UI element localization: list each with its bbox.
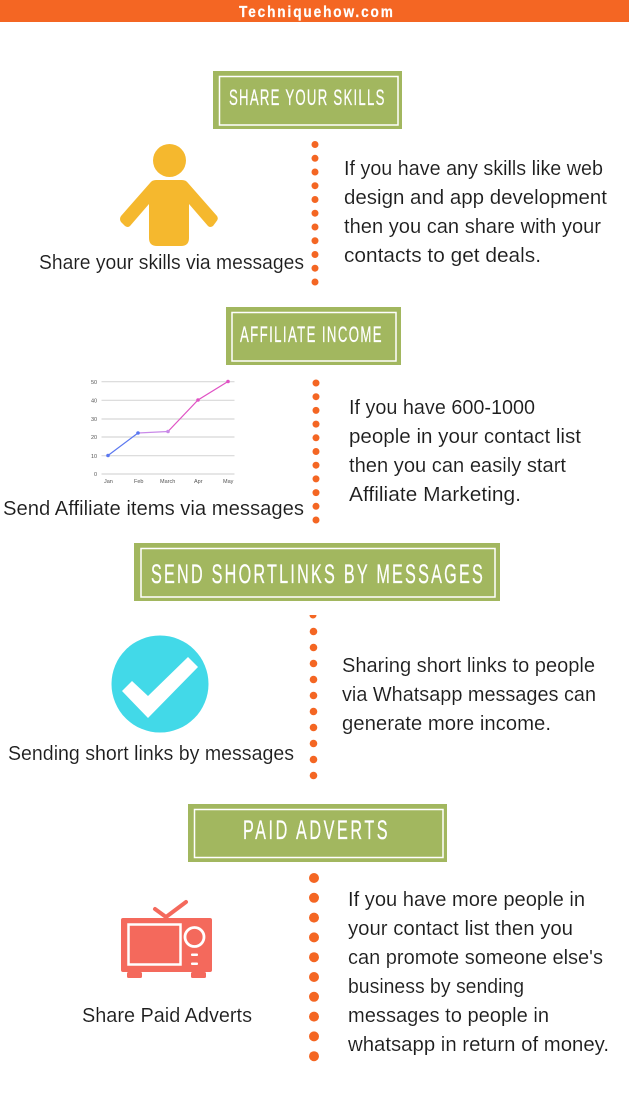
- caption: sending short links by messages: Sending short links by messages: [8, 743, 294, 765]
- line chart: 10: [91, 454, 97, 460]
- heading: paid adverts: PAID ADVERTS: [243, 815, 388, 845]
- icon: check mark: [112, 636, 208, 732]
- line chart: 20: [91, 435, 97, 441]
- heading: share your skills: [213, 71, 402, 129]
- line chart: [91, 380, 234, 485]
- dotted divider 1: [312, 141, 318, 286]
- line chart: 50: [91, 380, 97, 386]
- caption: send affiliate items via messages: Send Affiliate items via messages: [3, 498, 304, 520]
- panel: send shortlinks by messages: [8, 543, 596, 779]
- text block: shortlinks description: via Whatsapp messages can: [342, 684, 596, 706]
- text block: affiliate income description: If you have 600-1000: [349, 397, 535, 419]
- text block: paid adverts description: messages to people in: [348, 1005, 549, 1027]
- text block: share your skills description: contacts to get deals.: [344, 245, 541, 267]
- text block: shortlinks description: Sharing short links to people: [342, 655, 595, 677]
- heading: send shortlinks by messages: [134, 543, 500, 601]
- dotted divider 4: [309, 873, 319, 1061]
- text block: shortlinks description: [342, 655, 596, 735]
- line chart: 40: [91, 398, 97, 404]
- text block: paid adverts description: business by sending: [348, 976, 524, 998]
- text block: paid adverts description: If you have more people in: [348, 889, 585, 911]
- text block: affiliate income description: people in your contact list: [349, 426, 581, 448]
- panel: share your skills: [39, 71, 607, 286]
- icon: person: [120, 144, 218, 246]
- dotted divider 3: [310, 615, 317, 779]
- line chart: Jan: [104, 479, 113, 485]
- text block: paid adverts description: [347, 889, 609, 1056]
- panel: affiliate income: [3, 307, 581, 524]
- text block: share your skills description: [344, 158, 607, 267]
- line chart: March: [160, 479, 175, 485]
- text block: paid adverts description: can promote someone else's: [348, 947, 603, 969]
- text block: paid adverts description: whatsapp in return of money.: [347, 1034, 609, 1056]
- line chart: Feb: [134, 479, 143, 485]
- text block: affiliate income description: then you can easily start: [349, 455, 566, 477]
- heading: send shortlinks by messages: SEND SHORTLINKS BY MESSAGES: [151, 559, 483, 589]
- text block: share your skills description: If you have any skills like web: [344, 158, 603, 180]
- text block: affiliate income description: Affiliate Marketing.: [349, 484, 521, 506]
- line chart: 30: [91, 417, 97, 423]
- heading: share your skills: SHARE YOUR SKILLS: [229, 86, 384, 110]
- text block: share your skills description: design and app development: [344, 187, 607, 209]
- heading: affiliate income: [226, 307, 401, 365]
- text block: affiliate income description: [349, 397, 581, 506]
- caption: share your skills via messages: Share your skills via messages: [39, 252, 304, 274]
- text block: paid adverts description: your contact list then you: [348, 918, 573, 940]
- heading: paid adverts: [188, 804, 447, 862]
- heading: affiliate income: AFFILIATE INCOME: [240, 323, 382, 347]
- caption: share paid adverts: Share Paid Adverts: [82, 1005, 252, 1027]
- dotted divider 2: [312, 380, 320, 524]
- text block: share your skills description: then you can share with your: [344, 216, 601, 238]
- line chart: May: [223, 479, 234, 485]
- panel: paid adverts: [82, 804, 609, 1061]
- icon: television: [121, 902, 212, 978]
- text block: shortlinks description: generate more income.: [342, 713, 551, 735]
- top header bar: [0, 0, 629, 22]
- line chart: 0: [94, 472, 97, 478]
- line chart: Apr: [194, 479, 203, 485]
- top header bar: Techniquehow.com: [239, 4, 393, 21]
